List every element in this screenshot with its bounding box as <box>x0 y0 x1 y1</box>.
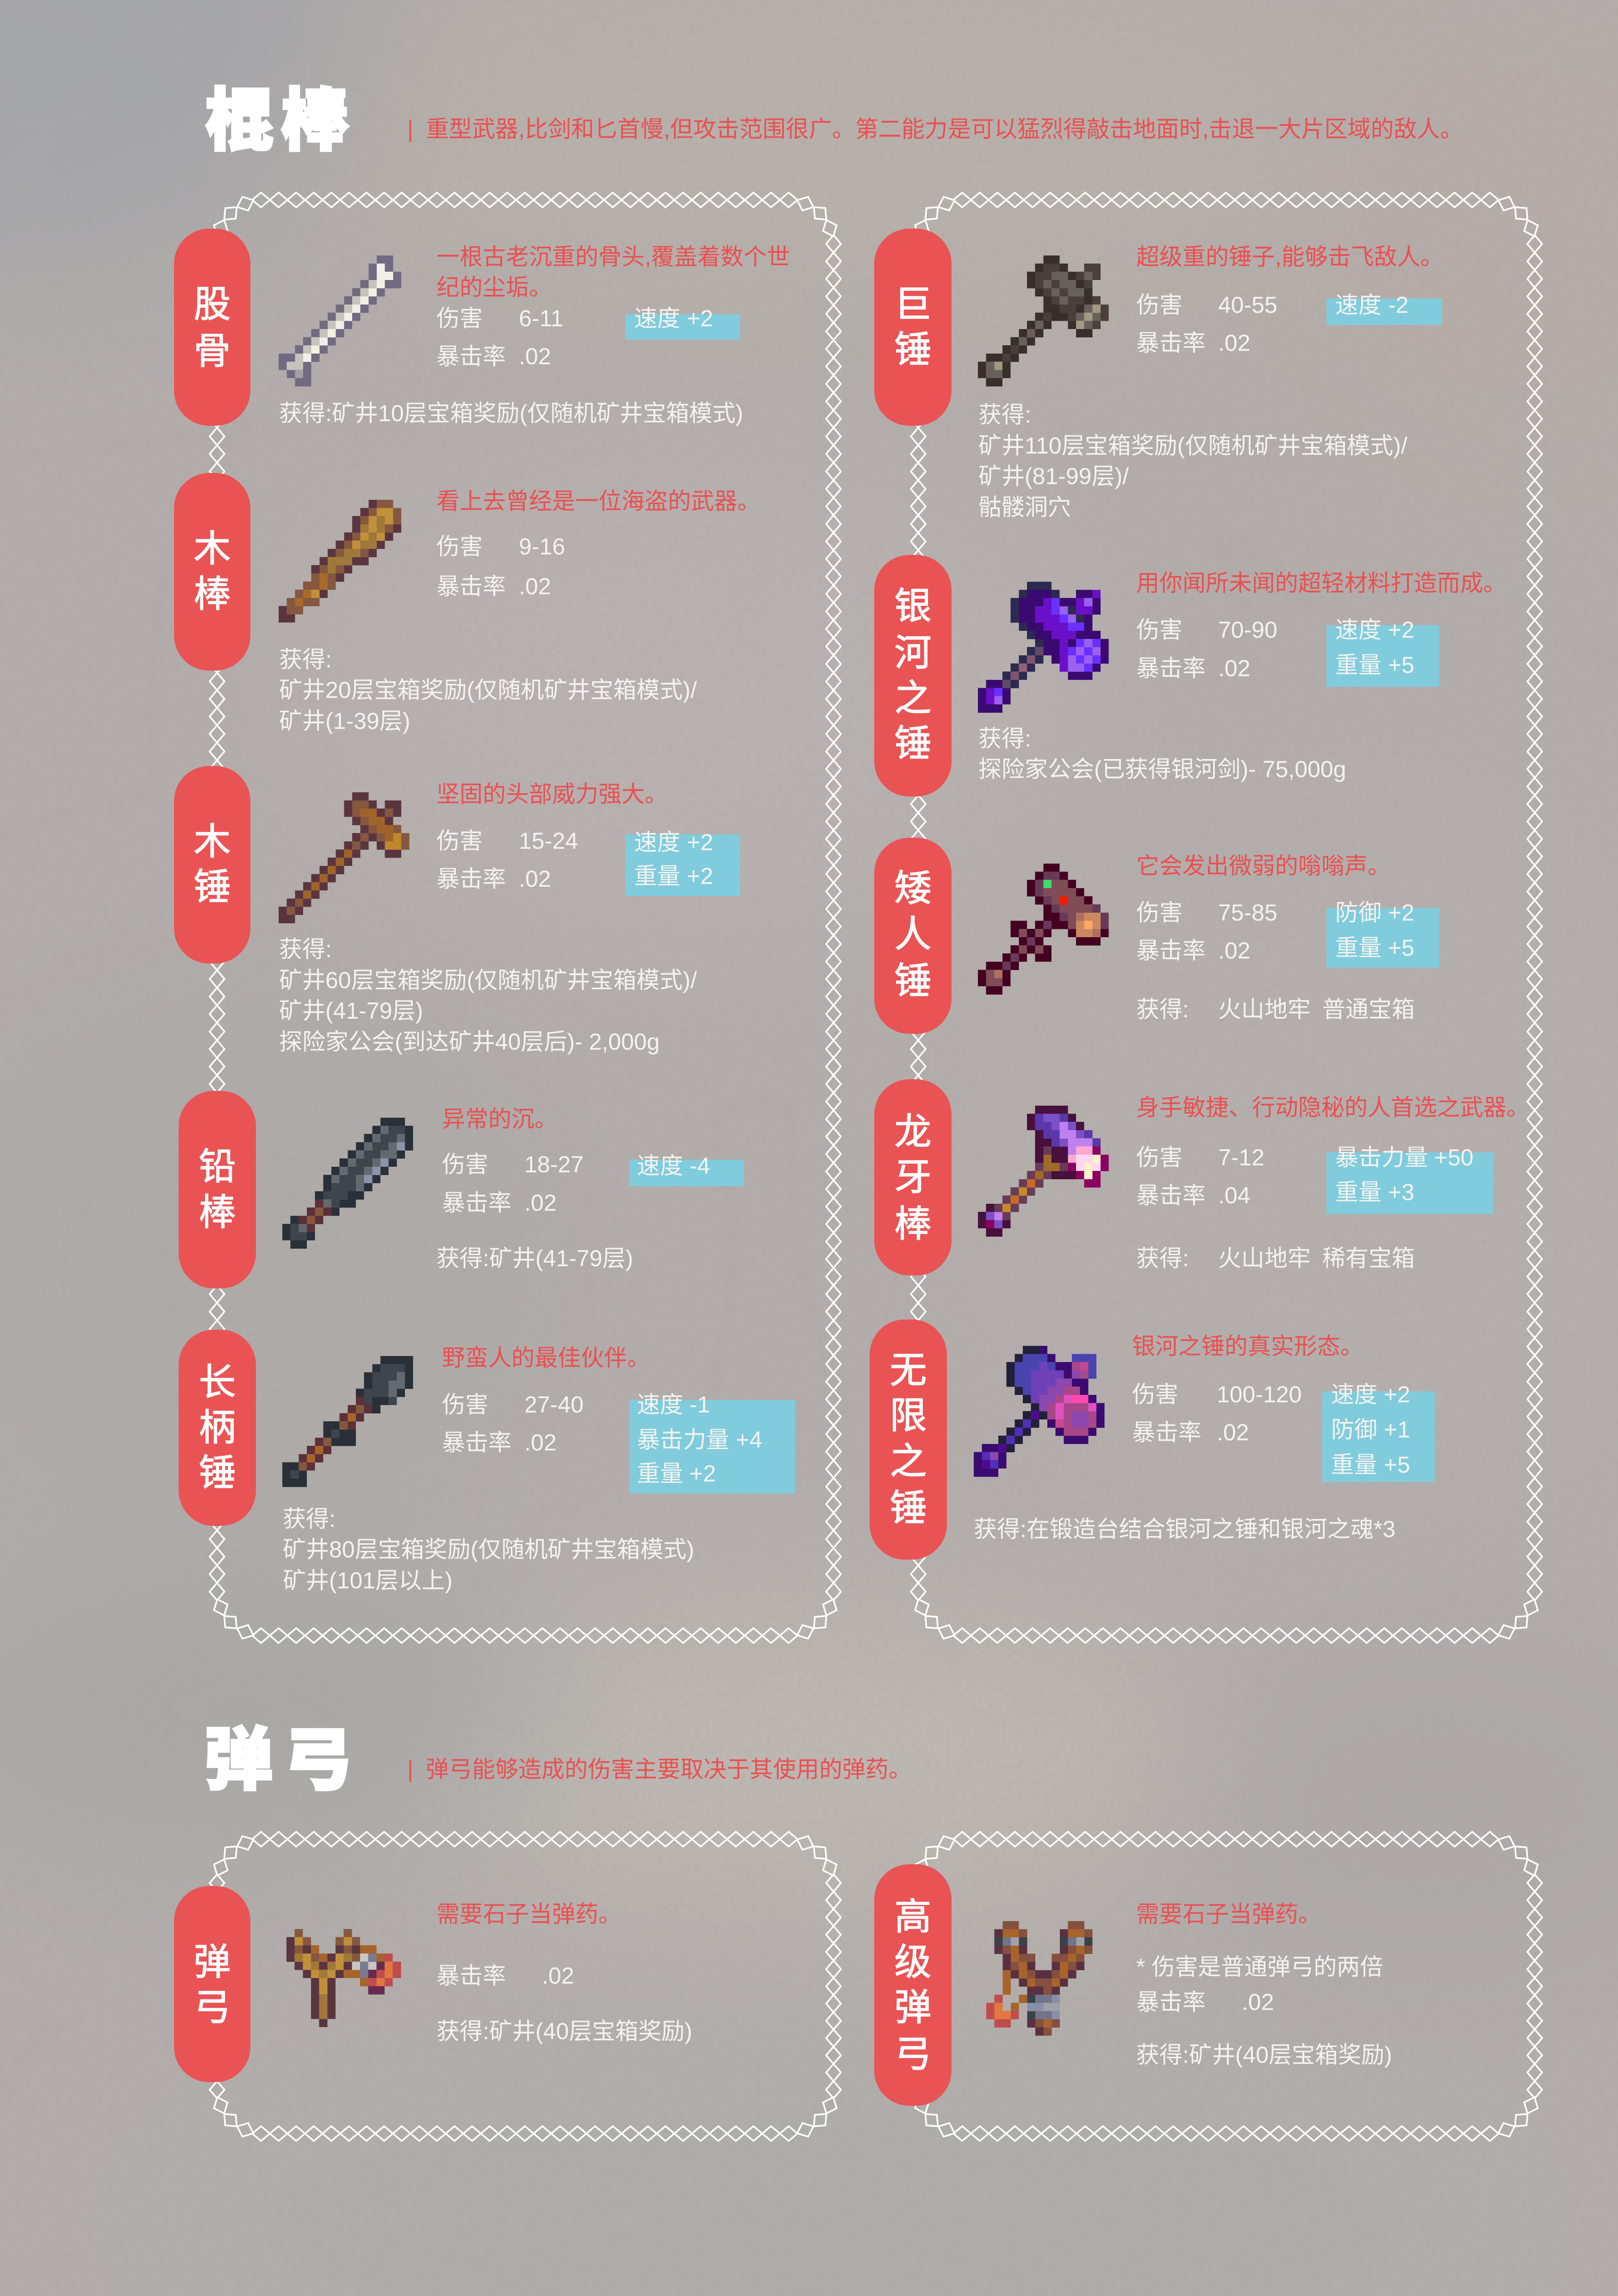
bonus box: 重量 +3 <box>1335 1179 1414 1205</box>
pill: 铅棒: 棒 <box>199 1192 236 1233</box>
source: 普通宝箱 <box>1322 996 1415 1022</box>
stats: .02 <box>1218 330 1251 356</box>
source: 矿井(101层以上) <box>283 1568 453 1593</box>
stats: 伤害 <box>1136 292 1182 318</box>
pill: 高级弹弓 <box>874 1864 952 2106</box>
stats: 6-11 <box>519 305 563 331</box>
subtitle: 棍棒 description: 重型武器,比剑和匕首慢,但攻击范围很广。第二能力是可以猛烈得敲击地面时,击退一大片区域的敌人。 <box>426 116 1463 142</box>
bonus box: 速度 -1 <box>637 1392 710 1418</box>
stats: .02 <box>1218 938 1251 964</box>
pill: 木锤 <box>174 766 250 964</box>
stats: 暴击率 <box>436 343 506 369</box>
source: 获得:矿井(40层宝箱奖励) <box>1136 2042 1392 2068</box>
subtitle: 弹弓 description: | <box>407 1756 413 1782</box>
pill: 龙牙棒: 牙 <box>894 1157 931 1198</box>
pill: 龙牙棒 <box>874 1079 952 1276</box>
pill: 银河之锤: 之 <box>894 678 931 719</box>
icon: galaxy hammer <box>978 586 1109 709</box>
stats: 暴击率 <box>442 1190 511 1216</box>
icon: wooden mallet <box>279 796 410 919</box>
panel: 高级弹弓 <box>874 1831 1543 2142</box>
frame: right panel diamond chain <box>910 192 1543 1644</box>
stats: 暴击率 <box>436 866 506 892</box>
bonus box: 速度 -2 <box>1335 292 1408 318</box>
pill: 高级弹弓: 弓 <box>894 2034 931 2075</box>
source: 获得: <box>1136 996 1189 1022</box>
pill: 龙牙棒: 龙 <box>894 1111 931 1152</box>
pill: 无限之锤: 锤 <box>890 1487 927 1529</box>
source: 探险家公会(到达矿井40层后)- 2,000g <box>279 1029 660 1055</box>
bonus box: 暴击力量 +4 <box>637 1427 762 1453</box>
stats: 70-90 <box>1218 617 1277 643</box>
stats: 伤害 <box>442 1392 488 1418</box>
description: 身手敏捷、行动隐秘的人首选之武器。 <box>1136 1095 1530 1120</box>
source: 获得: <box>279 936 332 962</box>
item: 矮人锤 <box>874 838 1439 1034</box>
bonus box: 重量 +2 <box>634 863 713 889</box>
bonus box: 速度 +2 <box>634 305 713 331</box>
panel: 棍棒 right column <box>870 192 1543 1644</box>
bonus box <box>629 1153 744 1186</box>
stats: .02 <box>1242 1989 1274 2015</box>
stats: 100-120 <box>1217 1381 1301 1407</box>
bonus box: 重量 +5 <box>1331 1452 1410 1478</box>
source: 火山地牢 <box>1218 1245 1311 1271</box>
pill: 无限之锤: 无 <box>890 1350 927 1391</box>
item: 铅棒 <box>179 1091 744 1288</box>
stats: .02 <box>1218 655 1251 681</box>
item: 木锤 <box>174 766 740 1055</box>
bonus box: 防御 +1 <box>1331 1417 1410 1443</box>
pill: 长柄锤 <box>179 1330 256 1526</box>
pill: 龙牙棒: 棒 <box>894 1203 931 1244</box>
bonus box <box>629 1392 795 1493</box>
source: 矿井110层宝箱奖励(仅随机矿井宝箱模式)/ <box>978 433 1407 459</box>
frame: slingshot diamond chain <box>209 1831 842 2142</box>
pill: 高级弹弓: 弹 <box>894 1987 931 2028</box>
pill: 铅棒: 铅 <box>199 1146 236 1187</box>
source: 获得:在锻造台结合银河之锤和银河之魂*3 <box>974 1516 1395 1542</box>
source: 探险家公会(已获得银河剑)- 75,000g <box>978 756 1346 782</box>
pill: 无限之锤 <box>870 1319 947 1560</box>
stats: 伤害 <box>1136 617 1182 643</box>
panel: 棍棒 left column <box>174 192 842 1644</box>
stats: 伤害 <box>436 828 483 854</box>
item: 银河之锤 <box>874 555 1506 796</box>
stats: .02 <box>542 1963 574 1989</box>
pill: 弹弓: 弓 <box>193 1987 230 2028</box>
source: 矿井(41-79层) <box>279 998 423 1024</box>
icon: bone club <box>279 260 401 382</box>
stats: 7-12 <box>1218 1145 1264 1170</box>
stats: .02 <box>519 573 551 599</box>
pill: 长柄锤: 长 <box>199 1362 236 1403</box>
description: 需要石子当弹药。 <box>436 1901 622 1927</box>
bonus box <box>625 829 740 896</box>
stats: 15-24 <box>519 828 578 854</box>
bonus box <box>1326 292 1442 325</box>
stats: 40-55 <box>1218 292 1277 318</box>
description: 超级重的锤子,能够击飞敌人。 <box>1136 244 1444 270</box>
pill: 银河之锤: 河 <box>894 632 931 673</box>
stats: .02 <box>524 1190 557 1216</box>
description: 纪的尘垢。 <box>436 274 552 300</box>
bonus box <box>625 305 740 340</box>
bonus box <box>1322 1381 1435 1482</box>
stats: 伤害 <box>1132 1381 1178 1407</box>
source: 稀有宝箱 <box>1322 1245 1415 1271</box>
description: 看上去曾经是一位海盗的武器。 <box>436 488 760 514</box>
pill: 木棒: 木 <box>193 528 230 569</box>
pill: 银河之锤: 锤 <box>894 723 931 764</box>
bonus box: 重量 +5 <box>1335 935 1414 961</box>
pill: 巨锤: 锤 <box>894 329 931 370</box>
stats: .04 <box>1218 1182 1251 1208</box>
source: 获得:矿井10层宝箱奖励(仅随机矿井宝箱模式) <box>279 400 743 426</box>
source: 获得:矿井(40层宝箱奖励) <box>436 2018 692 2044</box>
bonus box: 速度 +2 <box>1331 1381 1410 1407</box>
pill: 无限之锤: 限 <box>890 1395 927 1436</box>
pill: 长柄锤: 柄 <box>199 1407 236 1448</box>
source: 获得: <box>283 1506 336 1532</box>
pill: 股骨 <box>174 229 250 426</box>
pill: 银河之锤: 银 <box>894 585 931 627</box>
stats: 暴击率 <box>436 573 506 599</box>
stats: 伤害 <box>436 305 483 331</box>
icon: slingshot <box>286 1933 401 2023</box>
bonus box: 速度 -4 <box>637 1153 710 1179</box>
bonus box: 重量 +5 <box>1335 652 1414 678</box>
frame: iridium slingshot diamond chain <box>910 1831 1543 2142</box>
stats: .02 <box>1217 1419 1249 1445</box>
pill: 木棒: 棒 <box>193 573 230 615</box>
stats: 暴击率 <box>442 1430 511 1456</box>
heading: 棍棒: 棍棒 <box>205 83 355 159</box>
item: 长柄锤 <box>179 1330 795 1593</box>
source: 获得:矿井(41-79层) <box>436 1245 633 1271</box>
stats: 27-40 <box>524 1392 584 1418</box>
pill: 弹弓 <box>174 1886 250 2082</box>
description: 坚固的头部威力强大。 <box>436 781 668 807</box>
stats: 伤害 <box>442 1151 488 1177</box>
pill: 股骨: 骨 <box>193 330 230 372</box>
description: 野蛮人的最佳伙伴。 <box>442 1345 650 1371</box>
stats: 暴击率 <box>1136 1182 1206 1208</box>
source: 获得: <box>1136 1245 1189 1271</box>
description: 它会发出微弱的嗡嗡声。 <box>1136 853 1391 879</box>
source: 获得: <box>279 647 332 672</box>
description: 银河之锤的真实形态。 <box>1132 1333 1363 1359</box>
bonus box <box>1326 900 1439 968</box>
pill: 高级弹弓: 高 <box>894 1896 931 1937</box>
source: 获得: <box>978 402 1031 428</box>
item: 木棒 <box>174 473 760 734</box>
pill: 弹弓: 弹 <box>193 1941 230 1983</box>
pill: 长柄锤: 锤 <box>199 1452 236 1493</box>
stats: 暴击率 <box>1136 655 1206 681</box>
subtitle: 弹弓 description: 弹弓能够造成的伤害主要取决于其使用的弹药。 <box>426 1756 912 1782</box>
pill: 木棒 <box>174 473 250 671</box>
heading: 弹弓: 弹弓 <box>204 1722 363 1798</box>
panel: 弹弓 <box>174 1831 842 2142</box>
stats: 暴击率 <box>436 1963 506 1989</box>
stats: 9-16 <box>519 534 565 560</box>
stats: 暴击率 <box>1136 1989 1206 2015</box>
pill: 无限之锤: 之 <box>890 1441 927 1482</box>
pill: 木锤: 锤 <box>193 866 230 908</box>
description: 异常的沉。 <box>442 1106 558 1132</box>
frame: left panel diamond chain <box>209 192 842 1644</box>
bonus box <box>1326 1145 1494 1214</box>
bonus box: 防御 +2 <box>1335 900 1414 926</box>
pill: 巨锤: 巨 <box>894 284 931 325</box>
stats: 18-27 <box>524 1151 584 1177</box>
pill: 高级弹弓: 级 <box>894 1941 931 1983</box>
source: 矿井(81-99层)/ <box>978 463 1129 489</box>
source: 矿井60层宝箱奖励(仅随机矿井宝箱模式)/ <box>279 967 697 993</box>
stats: 伤害 <box>1136 1145 1182 1170</box>
icon: long handled hammer <box>282 1360 413 1483</box>
description: 需要石子当弹药。 <box>1136 1901 1321 1927</box>
description: 一根古老沉重的骨头,覆盖着数个世 <box>436 244 790 270</box>
bonus box: 速度 +2 <box>1335 617 1414 643</box>
icon: big hammer <box>978 260 1109 382</box>
stats: 伤害 <box>1136 900 1182 926</box>
stats: 伤害 <box>436 534 483 560</box>
item: 无限之锤 <box>870 1319 1435 1560</box>
item: 股骨 <box>174 229 790 426</box>
stats: 暴击率 <box>1132 1419 1201 1445</box>
stats: .02 <box>524 1430 557 1456</box>
pill: 银河之锤 <box>874 555 952 796</box>
pill: 木锤: 木 <box>193 821 230 862</box>
icon: master slingshot <box>986 1925 1093 2032</box>
stats: .02 <box>519 866 551 892</box>
stats: * 伤害是普通弹弓的两倍 <box>1136 1954 1383 1980</box>
icon: infinity gavel <box>974 1350 1105 1473</box>
icon: dragontooth club <box>978 1110 1109 1232</box>
source: 骷髅洞穴 <box>978 494 1071 520</box>
pill: 矮人锤: 人 <box>894 914 931 955</box>
bonus box: 速度 +2 <box>634 829 713 855</box>
source: 火山地牢 <box>1218 996 1311 1022</box>
pill: 铅棒 <box>179 1091 256 1288</box>
stats: 75-85 <box>1218 900 1277 926</box>
subtitle: 棍棒 description: | <box>407 116 413 142</box>
description: 用你闻所未闻的超轻材料打造而成。 <box>1136 570 1506 596</box>
icon: lead rod <box>282 1122 413 1244</box>
source: 矿井20层宝箱奖励(仅随机矿井宝箱模式)/ <box>279 677 697 703</box>
pill: 矮人锤: 锤 <box>894 960 931 1002</box>
pill: 矮人锤 <box>874 838 952 1034</box>
stats: .02 <box>519 343 551 369</box>
pill: 巨锤 <box>874 229 952 426</box>
stats: 暴击率 <box>1136 330 1206 356</box>
icon: wooden club <box>279 504 401 618</box>
bonus box: 重量 +2 <box>637 1461 716 1487</box>
stats: 暴击率 <box>1136 938 1206 964</box>
bonus box: 暴击力量 +50 <box>1335 1145 1474 1170</box>
item: 巨锤 <box>874 229 1444 520</box>
source: 矿井80层宝箱奖励(仅随机矿井宝箱模式) <box>283 1537 694 1562</box>
source: 获得: <box>978 726 1031 752</box>
source: 矿井(1-39层) <box>279 708 410 734</box>
bonus box <box>1326 617 1439 687</box>
pill: 矮人锤: 矮 <box>894 868 931 909</box>
item: 龙牙棒 <box>874 1079 1530 1276</box>
icon: dwarf hammer <box>978 868 1109 990</box>
pill: 股骨: 股 <box>193 284 230 325</box>
